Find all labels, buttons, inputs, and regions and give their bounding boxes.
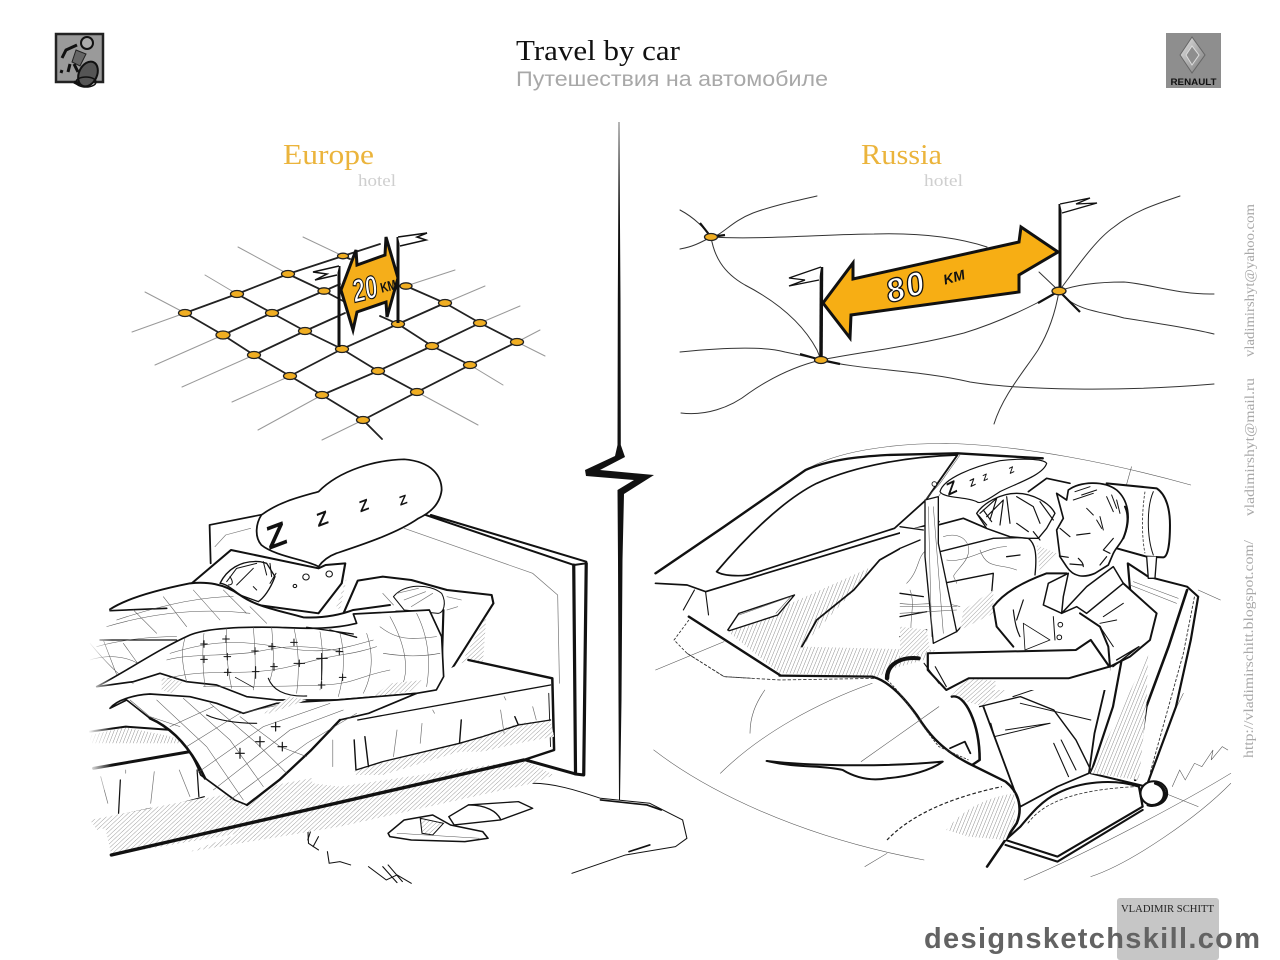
illustration: couple sleeping in a hotel bed (88, 459, 687, 883)
driver seat (1091, 563, 1198, 787)
flags: Russia start and end markers (789, 198, 1097, 357)
shadow hatching under the bed (104, 720, 554, 855)
speech bubble with snoring letters (257, 459, 442, 567)
thin body lines (656, 443, 1231, 880)
seat belt (900, 455, 960, 643)
front quilt (97, 610, 444, 700)
small speech bubble: Z (982, 471, 989, 483)
small speech bubble: Z (944, 476, 959, 500)
contact details: vladimirshyt@mail.ru (1242, 378, 1257, 516)
arrow: 80 km distance: 80 (881, 263, 931, 310)
small speech bubble: Z (1008, 464, 1016, 476)
contact details: vladimirshyt@yahoo.com (1242, 203, 1257, 357)
footer: website address: designsketchskill.com (924, 923, 1260, 955)
driver head (1057, 483, 1128, 576)
icon: author logo (56, 34, 103, 90)
passenger headrest (1028, 478, 1070, 492)
speech bubble with snoring letters: Z (315, 507, 330, 532)
bed scene foreground layers (257, 459, 533, 842)
title: Travel by car (516, 36, 681, 67)
windshield frame (656, 453, 1043, 615)
footer: author name plate (1117, 898, 1219, 960)
signature (1172, 747, 1228, 787)
car hood (654, 653, 1020, 867)
heading: Russia (861, 139, 963, 190)
back quilt (90, 583, 423, 727)
headboard (210, 513, 586, 775)
speech bubble with snoring letters: Z (264, 515, 290, 558)
mattress (111, 660, 554, 855)
pillows (192, 550, 493, 677)
icon: Renault logo: RENAULT (1170, 77, 1217, 88)
passenger blanket (900, 518, 1057, 660)
door panel (674, 530, 935, 680)
slippers (388, 802, 533, 842)
speech bubble with snoring letters: Z (398, 491, 408, 509)
speech bubble with snoring letters: Z (358, 496, 371, 516)
heading: Europe: Europe (283, 139, 374, 171)
small speech bubble (940, 459, 1047, 503)
upper figures (900, 455, 1178, 690)
chart: Europe dense road grid (132, 237, 545, 440)
driver arm (924, 640, 1139, 690)
contact details: http://vladimirschitt.blogspot.com/ (1241, 540, 1256, 758)
heading: Russia: Russia (861, 139, 942, 171)
heading: Russia: hotel (924, 171, 963, 190)
near sleeper head (220, 561, 276, 602)
driver torso (993, 567, 1157, 690)
steering wheel (887, 658, 980, 765)
arrow: 80 km distance: KM (941, 266, 967, 288)
car interior foreground (654, 640, 1167, 867)
chart: Russia sparse road network (680, 196, 1214, 424)
title (516, 36, 828, 91)
small speech bubble: Z (969, 477, 977, 490)
rug and floor (308, 783, 687, 883)
arrow: 20 km distance: KM (379, 276, 398, 296)
passenger head (977, 493, 1055, 540)
flags: Europe start and end markers (313, 233, 427, 347)
left bed side (90, 727, 204, 830)
seat cushion and hinge (1006, 781, 1167, 862)
title: Путешествия на автомобиле (516, 68, 828, 91)
illustration: driver falling asleep at the wheel while passenger sleeps (654, 443, 1231, 880)
divider: lightning line between Europe and Russia (585, 122, 654, 800)
bed scene background layers (90, 513, 687, 883)
heading: Europe (283, 139, 396, 190)
arrow: 20 km distance: 20 (348, 268, 381, 310)
footer: author name plate: VLADIMIR SCHITT (1121, 903, 1214, 915)
arrow: 20 km distance (341, 237, 398, 330)
icon: Renault logo (1166, 33, 1221, 88)
driver collar (1043, 567, 1123, 613)
contact details (1241, 203, 1257, 758)
arrow: 80 km distance (823, 227, 1058, 338)
driver headrest (1107, 483, 1178, 603)
driver lower body (950, 647, 1109, 807)
hanging quilt (110, 693, 417, 805)
far sleeper head (383, 586, 461, 613)
quilt layers (90, 561, 444, 805)
car interior background (656, 443, 1231, 880)
heading: Europe: hotel (358, 171, 396, 190)
